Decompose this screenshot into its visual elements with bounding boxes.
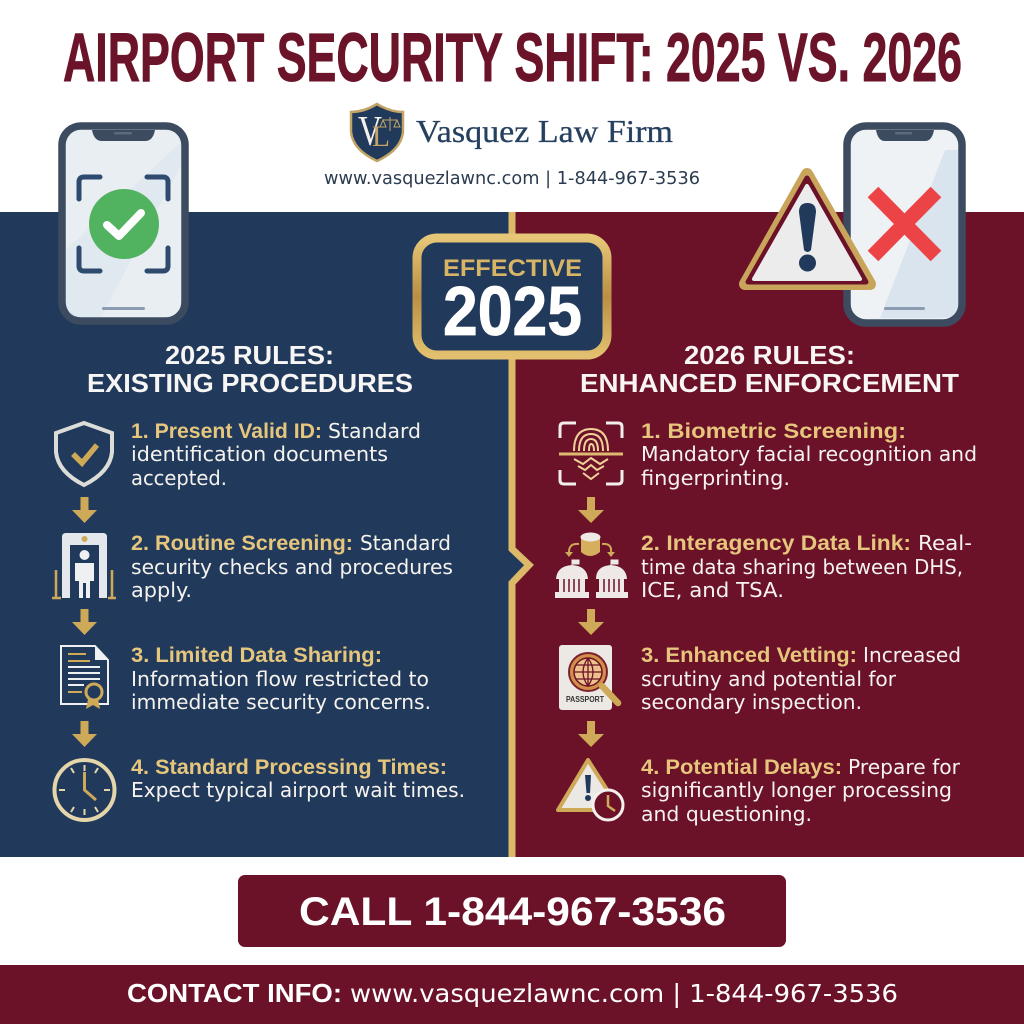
text: 2026 step 1: 1. Biometric Screening: [641, 420, 906, 443]
text: 2025 step 2: Standard [360, 531, 451, 555]
heading: 2026 rules: ENHANCED ENFORCEMENT [580, 368, 959, 398]
heading: 2025 rules [87, 340, 413, 398]
text: 2026 step 4: Prepare for [848, 755, 961, 779]
call to action button [238, 875, 786, 947]
text: 2025 step 4: 4. Standard Processing Times: [131, 756, 447, 779]
call to action button: CALL 1-844-967-3536 [299, 890, 726, 934]
text: 2026 step 4: significantly longer processing [641, 778, 952, 802]
text: 2025 step 3: immediate security concerns. [131, 690, 431, 714]
icon: phone with red X [847, 126, 962, 323]
text: 2026 step 4: and questioning. [641, 802, 812, 826]
badge: effective 2025: 2025 [443, 272, 582, 350]
text: 2025 step 1: accepted. [131, 466, 227, 490]
text: 2025 step 3: Information flow restricted to [131, 667, 429, 691]
text: 2025 step 2: apply. [131, 578, 192, 602]
text: 2026 step 1 [641, 420, 977, 490]
website and phone line: www.vasquezlawnc.com | 1-844-967-3536 [324, 169, 700, 189]
logo: Vasquez Law Firm: Vasquez Law Firm [416, 113, 673, 149]
icon: document with seal [61, 646, 108, 709]
text: 2026 step 4: 4. Potential Delays: [641, 756, 842, 779]
text: 2026 step 3: 3. Enhanced Vetting: [641, 644, 857, 667]
footer contact bar [0, 965, 1024, 1024]
heading: 2025 rules: EXISTING PROCEDURES [87, 368, 413, 398]
footer contact bar: www.vasquezlawnc.com | 1-844-967-3536 [350, 979, 898, 1008]
icon: warning triangle [745, 174, 870, 284]
arrow [72, 497, 97, 523]
icon: warning with clock [558, 760, 623, 820]
text: 2025 step 1: 1. Present Valid ID: [131, 420, 322, 443]
text: 2026 step 3: secondary inspection. [641, 690, 862, 714]
panel: 2025 rules background [0, 212, 529, 857]
text: 2026 step 3: Increased [863, 643, 961, 667]
text: 2026 step 3: scrutiny and potential for [641, 667, 897, 691]
text: 2025 step 2: 2. Routine Screening: [131, 532, 353, 555]
text: 2026 step 4 [641, 755, 961, 826]
text: 2025 step 3 [131, 644, 431, 714]
text: 2026 step 2: 2. Interagency Data Link: [641, 532, 911, 555]
heading: 2025 rules: 2025 RULES: [165, 340, 334, 370]
icon: shield check [56, 423, 112, 485]
text: 2025 step 4 [131, 756, 465, 802]
badge: effective 2025: EFFECTIVE [443, 255, 582, 282]
arrow [578, 609, 604, 635]
heading: 2026 rules: 2026 RULES: [684, 340, 855, 370]
text: 2026 step 3 [641, 643, 961, 714]
text: 2026 step 2: Real- [918, 531, 972, 555]
text: 2025 step 1 [131, 419, 421, 490]
icon: passport with magnifier: PASSPORT [566, 695, 604, 704]
logo: Vasquez Law Firm: L [372, 120, 390, 153]
text: 2026 step 2 [641, 531, 972, 602]
icon: passport with magnifier [559, 645, 618, 710]
text: 2025 step 1: identification documents [131, 442, 388, 466]
icon: fingerprint scan [559, 423, 623, 484]
arrow [578, 497, 604, 523]
icon: body scanner [52, 533, 116, 598]
arrow [72, 721, 97, 747]
arrow [72, 609, 97, 635]
text: 2026 step 1: fingerprinting. [641, 466, 790, 490]
text: 2025 step 4: Expect typical airport wait times. [131, 778, 465, 802]
logo: Vasquez Law Firm [351, 104, 673, 161]
arrow [578, 721, 604, 747]
panel: 2026 rules background [512, 212, 1024, 857]
text: 2025 step 2: security checks and procedures [131, 555, 453, 579]
text: 2025 step 2 [131, 531, 453, 602]
icon: clock [54, 760, 114, 820]
center divider with chevron [512, 212, 529, 857]
text: 2025 step 1: Standard [328, 419, 421, 443]
icon: phone with green check [62, 126, 185, 321]
badge: effective 2025 [417, 238, 607, 355]
text: 2026 step 2: time data sharing between DHS, [641, 555, 963, 579]
footer contact bar: CONTACT INFO: [127, 978, 342, 1008]
heading: 2026 rules [580, 340, 959, 398]
logo: Vasquez Law Firm: V [358, 109, 382, 155]
icon: data link between government buildings [555, 532, 628, 598]
text: 2026 step 1: Mandatory facial recognition and [641, 442, 977, 466]
text: 2025 step 3: 3. Limited Data Sharing: [131, 644, 382, 667]
text: 2026 step 2: ICE, and TSA. [641, 578, 784, 602]
